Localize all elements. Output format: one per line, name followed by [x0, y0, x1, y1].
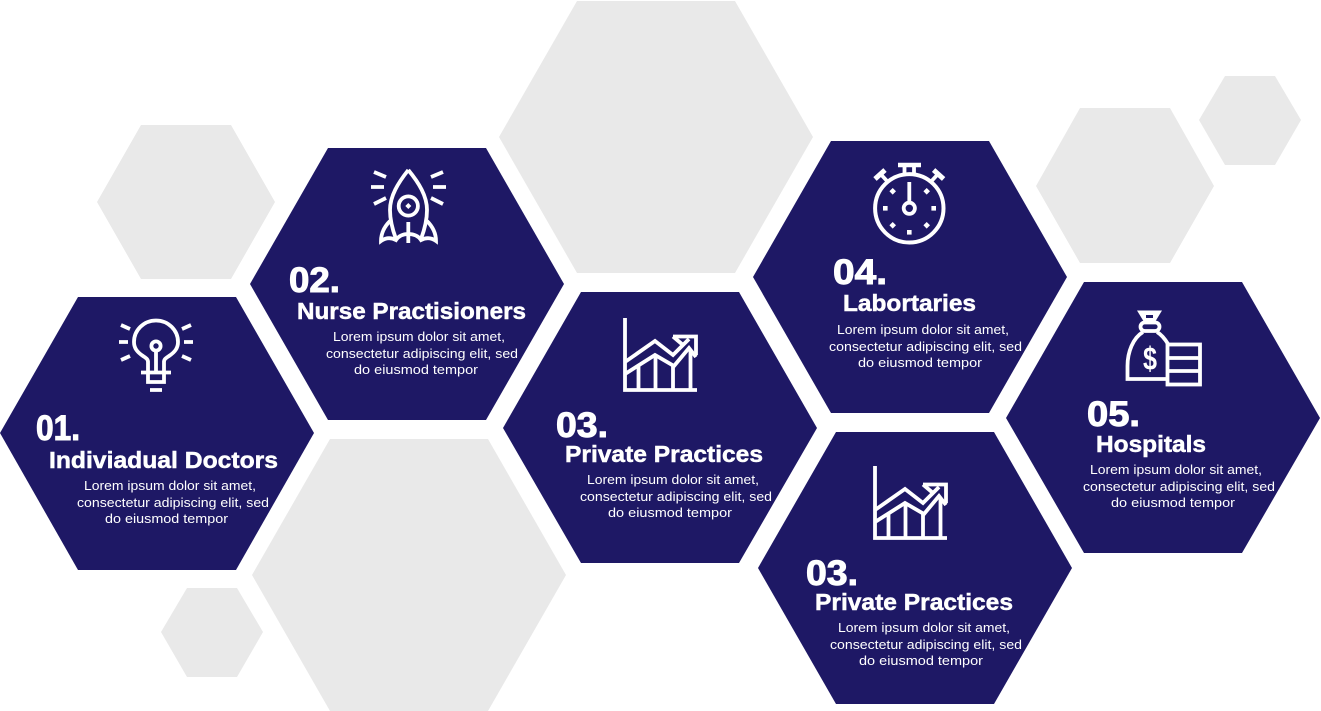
icon: growth chart [875, 466, 947, 538]
heading: Private Practices [565, 441, 763, 467]
number: 02. [289, 261, 340, 300]
body text: do eiusmod tempor [105, 511, 229, 526]
body text: Lorem ipsum dolor sit amet, [333, 329, 505, 344]
body text: do eiusmod tempor [1111, 495, 1236, 510]
heading: Hospitals [1096, 431, 1206, 457]
body text: consectetur adipiscing elit, sed [830, 637, 1022, 652]
body text: do eiusmod tempor [858, 355, 983, 370]
body text: consectetur adipiscing elit, sed [77, 495, 269, 510]
body text: do eiusmod tempor [859, 653, 984, 668]
body text [1083, 462, 1275, 510]
number: 05. [1087, 395, 1140, 434]
body text: do eiusmod tempor [608, 505, 733, 520]
background hexagon: medium right [1036, 108, 1214, 263]
panel: 03 Private Practices (centre) [503, 292, 817, 563]
body text: Lorem ipsum dolor sit amet, [837, 322, 1009, 337]
background hexagon: medium left [97, 125, 275, 279]
body text: Lorem ipsum dolor sit amet, [1090, 462, 1262, 477]
background hexagon: large top centre [499, 1, 813, 273]
background hexagon: small bottom left [161, 588, 263, 677]
number: 03. [806, 554, 858, 593]
number: 03. [556, 406, 608, 445]
heading: Indiviadual Doctors [49, 447, 278, 473]
background hexagon: small top right [1199, 76, 1301, 165]
body text: do eiusmod tempor [354, 362, 479, 377]
body text: consectetur adipiscing elit, sed [829, 339, 1022, 354]
icon: rocket [371, 170, 446, 243]
heading: Nurse Practisioners [297, 298, 526, 324]
number: 04. [833, 253, 887, 292]
icon: light bulb [119, 320, 193, 390]
body text [829, 322, 1022, 370]
body text [77, 478, 269, 526]
panel: 02 Nurse Practisioners [250, 148, 564, 420]
number: 01. [36, 409, 80, 448]
body text: consectetur adipiscing elit, sed [1083, 479, 1275, 494]
body text: Lorem ipsum dolor sit amet, [84, 478, 256, 493]
body text [830, 620, 1022, 668]
heading: Labortaries [843, 290, 976, 316]
icon: money bag and coins [1128, 310, 1200, 384]
panel: 05 Hospitals [1006, 282, 1320, 553]
body text [326, 329, 518, 377]
icon: money bag and coins: $ [1143, 340, 1157, 376]
panel: 04 Labortaries [753, 141, 1067, 413]
panel: 03 Private Practices (lower) [758, 432, 1072, 704]
icon: growth chart [625, 318, 697, 390]
body text [580, 472, 772, 520]
body text: Lorem ipsum dolor sit amet, [587, 472, 759, 487]
body text: Lorem ipsum dolor sit amet, [838, 620, 1010, 635]
panel: 01 Individual Doctors [0, 297, 314, 570]
heading: Private Practices [815, 589, 1013, 615]
icon: stopwatch [875, 165, 944, 242]
body text: consectetur adipiscing elit, sed [326, 346, 518, 361]
background hexagon: large bottom [252, 439, 566, 711]
body text: consectetur adipiscing elit, sed [580, 489, 772, 504]
